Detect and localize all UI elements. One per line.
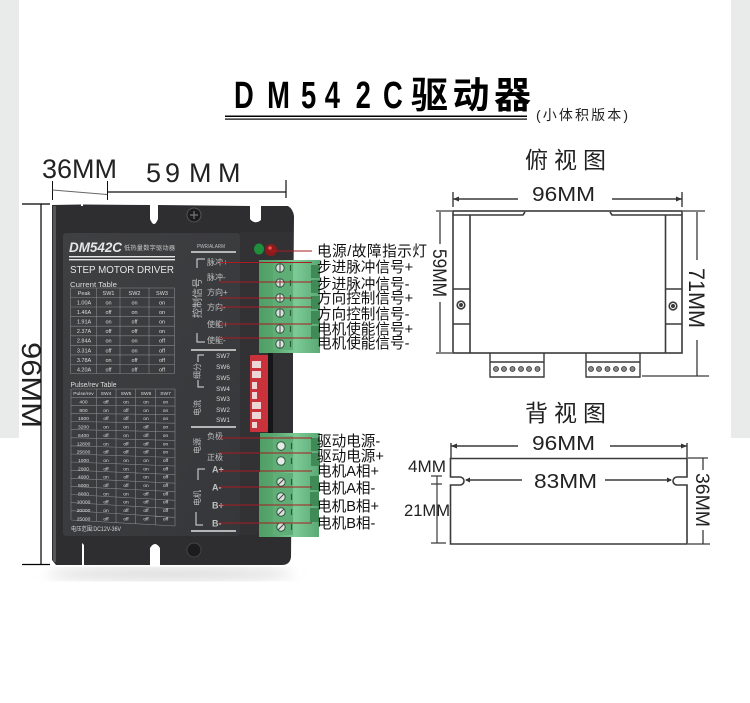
pulse per revolution table: on — [163, 400, 168, 406]
back view 4MM dimension — [408, 458, 446, 484]
pulse per revolution table: on — [143, 484, 149, 489]
back view 36MM dimension — [688, 458, 712, 544]
subtitle: (小体积版本) — [536, 107, 628, 123]
pulse per revolution table: 3200 — [78, 425, 89, 431]
callout labels: signal terminals: 步进脉冲信号- — [317, 276, 410, 293]
pulse per revolution table: on — [143, 476, 149, 481]
top view 59MM dimension: 59MM — [428, 249, 449, 297]
current table: on — [159, 320, 165, 326]
pulse per revolution table: off — [123, 516, 129, 522]
pulse per revolution table: on — [163, 417, 168, 422]
title: DM542C — [234, 75, 403, 117]
pulse per revolution table: on — [123, 459, 129, 464]
pulse per revolution table: 1600 — [78, 416, 89, 422]
pulse per revolution table: 4000 — [78, 475, 89, 481]
pulse per revolution table: on — [103, 459, 109, 464]
current table: SW3 — [156, 291, 168, 297]
pulse per revolution table: 1000 — [78, 458, 89, 464]
back view 36MM dimension: 36MM — [691, 473, 712, 527]
current table: 1.00A — [77, 300, 92, 306]
pulse per revolution table: off — [163, 516, 169, 522]
brand heading — [69, 240, 176, 276]
pulse per revolution table: on — [163, 426, 168, 431]
pulse per revolution table: off — [123, 508, 129, 514]
pulse per revolution table: off — [163, 483, 169, 489]
brand heading: DM542C — [69, 240, 122, 255]
pulse per revolution table: on — [163, 451, 168, 456]
pulse per revolution table: 25000 — [77, 516, 91, 522]
heading: top view: 俯视图 — [525, 147, 612, 173]
pulse per revolution table: Pulse/rev Table — [70, 382, 117, 389]
diagram: back view — [404, 432, 712, 544]
panel terminal legends: 电机 — [192, 490, 202, 506]
panel terminal legends: A- — [212, 482, 222, 492]
pulse per revolution table: on — [143, 409, 149, 414]
pulse per revolution table: off — [143, 425, 149, 431]
pulse per revolution table: off — [103, 416, 109, 422]
pulse per revolution table: 400 — [79, 400, 88, 406]
pulse per revolution table: on — [123, 434, 129, 439]
back view 4MM dimension: 4MM — [408, 458, 446, 476]
current table: 2.84A — [77, 339, 92, 345]
pulse per revolution table: off — [143, 441, 149, 447]
current table: off — [105, 348, 112, 354]
top view width dimension: 96MM — [532, 183, 595, 206]
pulse per revolution table: on — [123, 400, 129, 406]
pulse per revolution table: 25600 — [77, 450, 91, 456]
top view 71MM dimension: 71MM — [684, 268, 709, 328]
pulse per revolution table: off — [143, 508, 149, 514]
back view 83MM dimension — [465, 470, 672, 493]
current table: off — [105, 367, 112, 373]
title: 驱动器 — [411, 75, 531, 116]
callout labels: power and motor terminals: 驱动电源- — [317, 433, 380, 450]
callout labels: power and motor terminals — [317, 433, 384, 532]
pulse per revolution table: on — [143, 467, 149, 472]
pulse per revolution table: off — [103, 400, 109, 406]
heading: back view: 背视图 — [525, 400, 612, 426]
pulse per revolution table: off — [103, 500, 109, 506]
pulse per revolution table: off — [123, 416, 129, 422]
callout labels: signal terminals — [317, 242, 427, 352]
current table: off — [105, 310, 112, 316]
panel terminal legends: 电流 — [192, 400, 202, 416]
current table: on — [131, 300, 138, 306]
panel terminal legends: 负极 — [207, 431, 223, 441]
callout leader lines — [219, 251, 312, 523]
pulse per revolution table: off — [123, 408, 129, 414]
back view outline — [450, 458, 687, 544]
device: stepper driver photo — [45, 204, 320, 580]
pulse per revolution table: off — [143, 450, 149, 456]
current table: on — [105, 300, 112, 306]
top view housing — [453, 211, 682, 353]
pulse per revolution table: on — [123, 426, 129, 431]
pulse per revolution table: 800 — [79, 408, 88, 414]
pulse per revolution table: 10000 — [77, 500, 91, 506]
current table: on — [159, 300, 165, 306]
current table: SW1 — [103, 291, 114, 297]
pulse per revolution table: off — [163, 500, 169, 506]
pulse per revolution table: off — [123, 441, 129, 447]
pulse per revolution table: 8000 — [78, 491, 89, 497]
panel terminal legends: 正极 — [207, 452, 223, 462]
current table: off — [105, 329, 112, 335]
green terminal block: power — [260, 433, 320, 472]
panel terminal legends: 脉冲+ — [207, 257, 228, 267]
pulse per revolution table: on — [163, 434, 168, 439]
current table: off — [159, 348, 165, 354]
pulse per revolution table: on — [103, 409, 109, 414]
pulse per revolution table: on — [163, 442, 168, 447]
current table: on — [131, 310, 138, 316]
pulse per revolution table: off — [143, 491, 149, 497]
brand heading: STEP MOTOR DRIVER — [70, 264, 174, 276]
dimension: 59MM width: 59MM — [146, 158, 240, 188]
current table: on — [131, 348, 138, 354]
current table: 4.20A — [77, 367, 92, 373]
callout labels: signal terminals: 电机使能信号+ — [317, 321, 413, 338]
callout labels: power and motor terminals: 电机B相- — [317, 515, 376, 532]
pulse per revolution table: off — [123, 483, 129, 489]
panel terminal legends: B- — [212, 518, 222, 528]
switch labels: SW1 — [216, 417, 230, 424]
panel terminal legends: A+ — [212, 464, 224, 474]
pulse per revolution table: 20000 — [77, 508, 91, 514]
mounting screws — [187, 208, 201, 557]
callout labels: signal terminals: 步进脉冲信号+ — [317, 259, 413, 276]
current table: SW2 — [129, 291, 140, 297]
current table: on — [159, 329, 165, 335]
pulse per revolution table: SW5 — [121, 391, 132, 397]
switch labels: SW7 — [216, 353, 230, 360]
green terminal block: signal — [259, 260, 320, 353]
current table: on — [105, 320, 112, 326]
pulse per revolution table: off — [123, 450, 129, 456]
current table: on — [105, 339, 112, 345]
pulse per revolution table: off — [103, 483, 109, 489]
dimension: 36MM depth — [42, 154, 117, 200]
back view 21MM dimension: 21MM — [404, 502, 450, 520]
pulse per revolution table — [70, 382, 175, 526]
current table: 1.91A — [77, 320, 92, 326]
callout labels: signal terminals: 电源/故障指示灯 — [317, 242, 427, 260]
indicator LEDs — [254, 244, 277, 256]
pulse per revolution table: on — [123, 501, 129, 506]
panel terminal legends: PWR/ALARM — [197, 244, 225, 250]
panel terminal legends: B+ — [212, 500, 224, 510]
pulse per revolution table: 5000 — [78, 483, 89, 489]
panel terminal legends: 方向- — [207, 302, 226, 312]
pulse per revolution table: on — [143, 400, 149, 406]
panel terminal legends — [191, 244, 236, 531]
current table: off — [131, 358, 138, 364]
pulse per revolution table: on — [143, 459, 149, 464]
callout labels: signal terminals: 方向控制信号+ — [317, 290, 413, 307]
dimension: 59MM width — [108, 158, 286, 198]
device body — [52, 204, 294, 565]
back view width dimension — [451, 432, 687, 458]
top view width dimension — [453, 183, 682, 207]
current table: off — [159, 339, 165, 345]
current table: on — [131, 339, 138, 345]
back view 83MM dimension: 83MM — [534, 470, 597, 493]
pulse per revolution table: off — [163, 458, 169, 464]
pulse per revolution table: 6400 — [78, 433, 89, 439]
pulse per revolution table: on — [103, 492, 109, 497]
pulse per revolution table: off — [163, 475, 169, 481]
pulse per revolution table: on — [103, 509, 109, 514]
callout labels: power and motor terminals: 电机A相+ — [317, 463, 379, 480]
back view width dimension: 96MM — [532, 432, 595, 455]
switch labels — [216, 353, 230, 424]
pulse per revolution table: SW4 — [101, 391, 112, 397]
current table: off — [131, 320, 138, 326]
current table: 3.31A — [77, 348, 92, 354]
device shadow — [45, 568, 295, 580]
panel terminal legends: 方向+ — [207, 287, 228, 297]
pulse per revolution table: 12800 — [77, 441, 91, 447]
dimension: 96MM height — [16, 204, 50, 565]
pulse per revolution table: off — [103, 450, 109, 456]
top view connectors — [490, 353, 640, 377]
current table: Current Table — [70, 282, 117, 289]
current table: 3.78A — [77, 358, 92, 364]
pulse per revolution table: off — [103, 433, 109, 439]
dimension: 96MM height: 96MM — [16, 342, 46, 428]
callout labels: power and motor terminals: 电机A相- — [317, 480, 376, 497]
device left edge highlight — [53, 206, 56, 562]
switch labels: SW3 — [216, 396, 230, 403]
switch labels: SW2 — [216, 407, 230, 414]
pulse per revolution table: off — [103, 516, 109, 522]
current table: Peak — [78, 291, 91, 297]
panel terminal legends: 使能- — [207, 335, 226, 345]
back view 21MM dimension — [404, 484, 450, 543]
current table: on — [159, 310, 165, 316]
pulse per revolution table: SW7 — [160, 391, 171, 397]
pulse per revolution table: off — [123, 475, 129, 481]
panel terminal legends: 细分 — [192, 363, 202, 379]
brand heading: 低热量数字驱动器 — [124, 244, 176, 252]
switch labels: SW4 — [216, 386, 230, 393]
pulse per revolution table: Pulse/rev — [73, 391, 94, 397]
pulse per revolution table: 2000 — [78, 466, 89, 472]
switch labels: SW5 — [216, 375, 230, 382]
pulse per revolution table: on — [143, 417, 149, 422]
callout labels: signal terminals: 电机使能信号- — [317, 335, 410, 352]
panel terminal legends: 脉冲- — [207, 272, 226, 282]
current table: off — [159, 358, 165, 364]
panel terminal legends: 使能+ — [207, 319, 228, 329]
pulse per revolution table: on — [163, 409, 168, 414]
pulse per revolution table: off — [163, 508, 169, 514]
current table: 1.46A — [77, 310, 92, 316]
red DIP switch — [250, 355, 268, 432]
pulse per revolution table: off — [103, 466, 109, 472]
pulse per revolution table: SW6 — [141, 391, 152, 397]
device face panel — [63, 233, 240, 536]
current table: off — [159, 367, 165, 373]
pulse per revolution table: off — [163, 466, 169, 472]
title — [225, 75, 531, 120]
panel terminal legends: 电源 — [192, 438, 202, 454]
current table — [70, 282, 174, 374]
pulse per revolution table: off — [163, 491, 169, 497]
dimension: 36MM depth: 36MM — [42, 154, 117, 184]
pulse per revolution table: on — [103, 476, 109, 481]
top view 71MM dimension — [642, 211, 709, 376]
callout labels: power and motor terminals: 驱动电源+ — [317, 448, 384, 465]
pulse per revolution table: off — [143, 516, 149, 522]
device channel — [240, 232, 293, 535]
voltage range note: 电压范围:DC12V-36V — [71, 525, 121, 533]
pulse per revolution table: off — [143, 500, 149, 506]
green terminal block: motor — [259, 472, 319, 537]
switch labels: SW6 — [216, 364, 230, 371]
pulse per revolution table: on — [123, 467, 129, 472]
current table: on — [105, 358, 112, 364]
callout labels: signal terminals: 方向控制信号- — [317, 306, 410, 323]
panel terminal legends: 控制信号 — [191, 278, 204, 318]
callout labels: power and motor terminals: 电机B相+ — [317, 498, 379, 515]
pulse per revolution table: on — [123, 492, 129, 497]
top view 59MM dimension — [428, 211, 452, 353]
diagram: top view — [428, 183, 709, 377]
pulse per revolution table: on — [103, 426, 109, 431]
current table: off — [131, 329, 138, 335]
pulse per revolution table: on — [103, 442, 109, 447]
current table: off — [131, 367, 138, 373]
current table: 2.37A — [77, 329, 92, 335]
pulse per revolution table: off — [143, 433, 149, 439]
